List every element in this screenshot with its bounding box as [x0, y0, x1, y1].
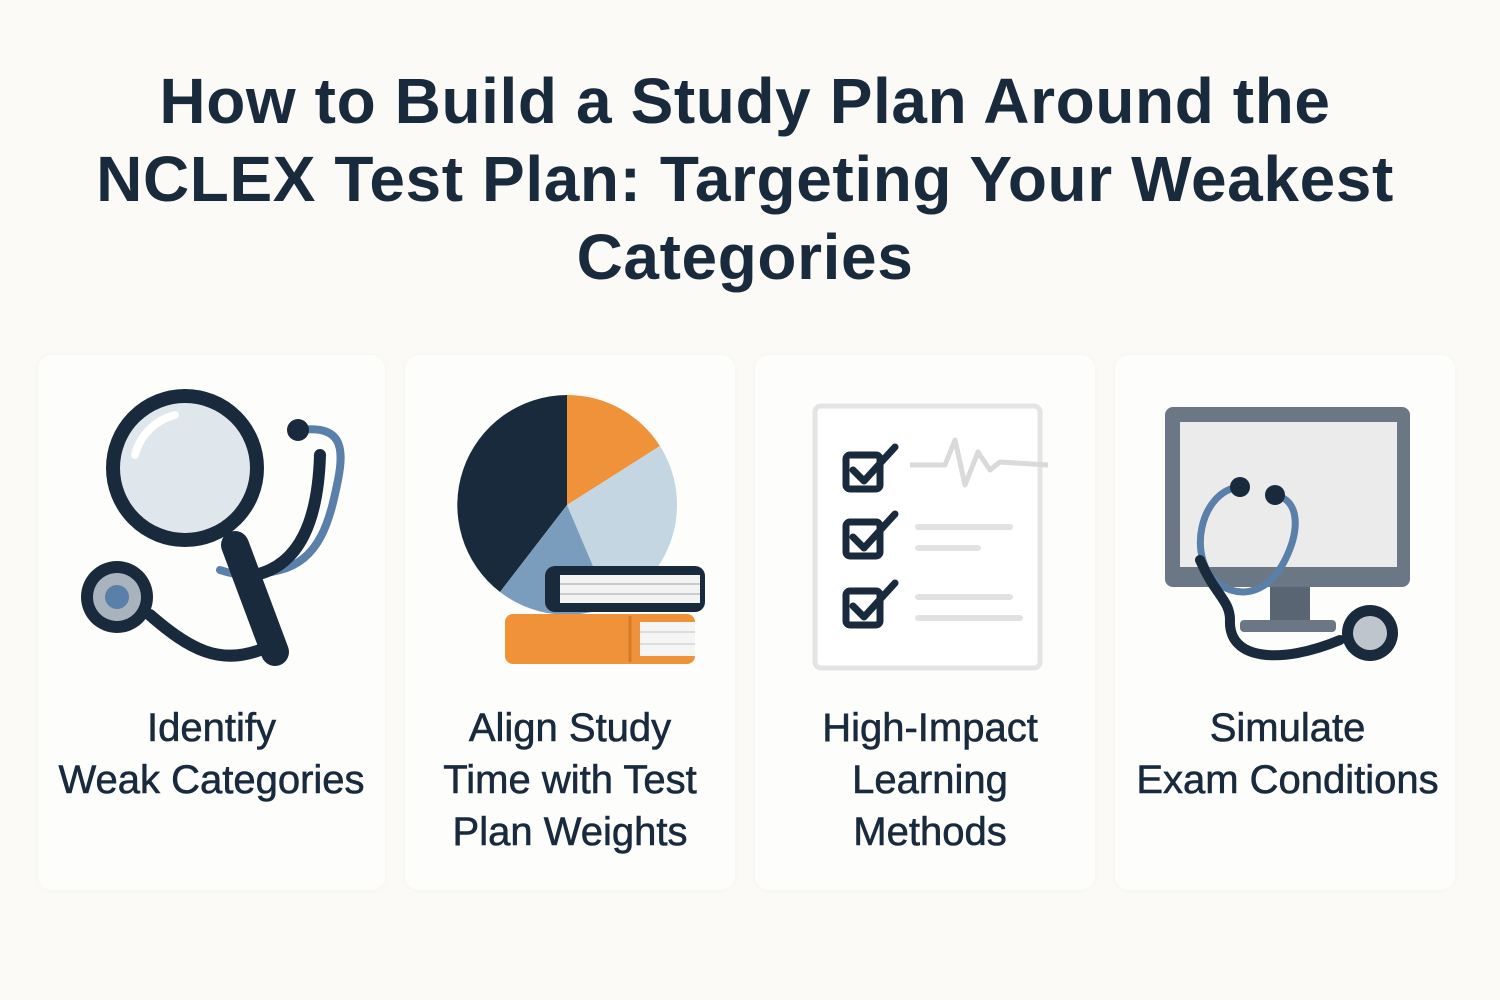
title: How to Build a Study Plan Around the [159, 65, 1331, 137]
label: identify: Weak Categories [58, 758, 365, 802]
panel: align [405, 355, 735, 890]
title [96, 65, 1394, 293]
title: Categories [577, 221, 913, 293]
label: align: Plan Weights [453, 810, 687, 854]
label: identify [58, 706, 365, 802]
label: simulate: Simulate [1210, 706, 1365, 750]
label: align: Align Study [469, 706, 671, 750]
title: NCLEX Test Plan: Targeting Your Weakest [96, 143, 1394, 215]
label: identify: Identify [147, 706, 276, 750]
panel: simulate [1115, 355, 1455, 890]
panel: identify [38, 355, 385, 890]
panel: methods [755, 355, 1095, 890]
label: align: Time with Test [443, 758, 697, 802]
icon: pie chart and books [457, 395, 705, 664]
label: simulate: Exam Conditions [1136, 758, 1439, 802]
label: methods: High-Impact [822, 706, 1038, 750]
label: simulate [1136, 706, 1439, 802]
icon: checklist [815, 406, 1048, 668]
icon: magnifier and stethoscope [81, 396, 341, 656]
label: methods: Learning [852, 758, 1008, 802]
icon: monitor with stethoscope [1165, 407, 1410, 661]
label: align [443, 706, 697, 854]
label: methods [822, 706, 1038, 854]
label: methods: Methods [853, 810, 1007, 854]
